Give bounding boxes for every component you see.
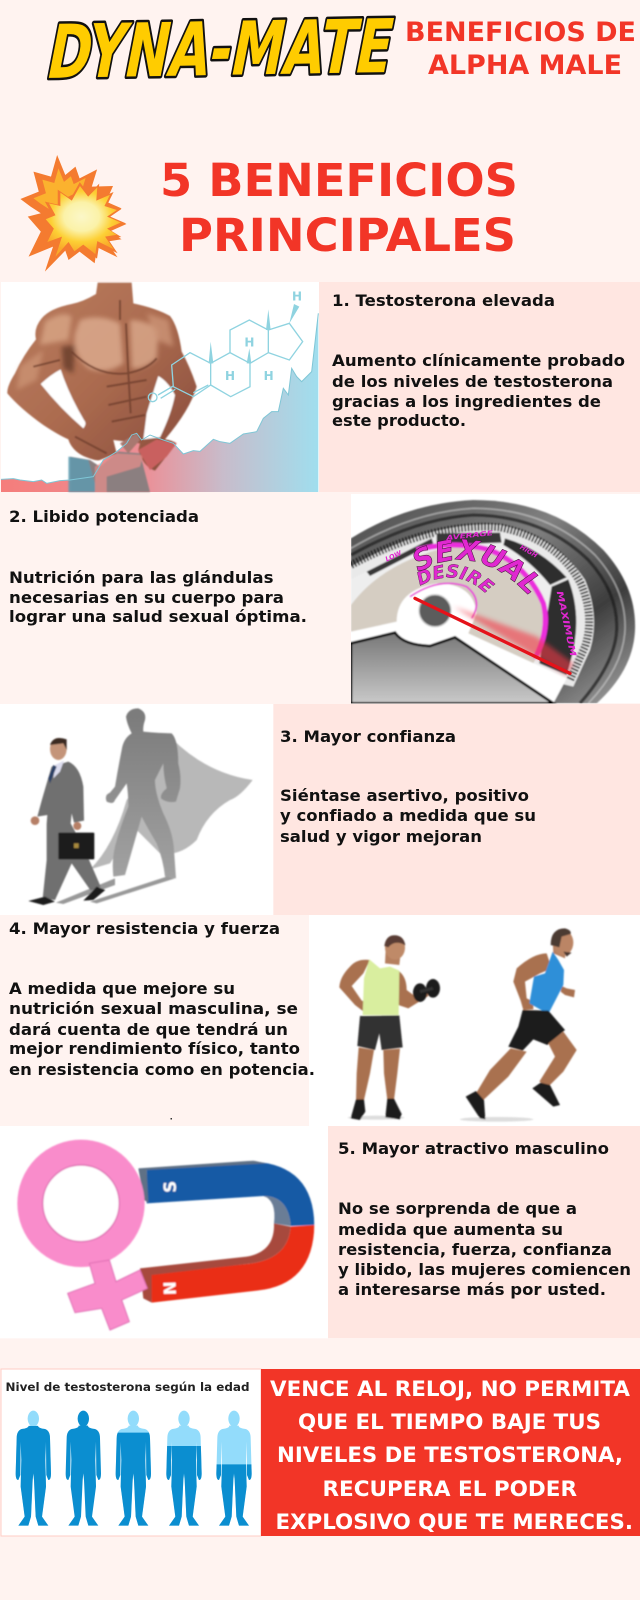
text block 5: y libido, las mujeres comiencen — [338, 1260, 631, 1279]
text block 5: No se sorprenda de que a — [338, 1199, 577, 1218]
image: businessman with superhero shadow — [0, 704, 273, 915]
text block 4: dará cuenta de que tendrá un — [9, 1020, 288, 1039]
text block 4: A medida que mejore su — [9, 979, 235, 998]
header subtitle: BENEFICIOS DE — [405, 17, 636, 48]
gauge labels: HIGH — [518, 543, 539, 560]
text block 2: necesarias en su cuerpo para — [9, 588, 284, 607]
molecule diagram — [148, 290, 303, 402]
text block 1: de los niveles de testosterona — [332, 372, 613, 391]
hero shadow — [106, 708, 181, 878]
text block 1 — [332, 351, 625, 430]
image: female symbol and magnet — [0, 1126, 328, 1338]
female symbol — [30, 1153, 147, 1330]
main title: PRINCIPALES — [179, 209, 516, 262]
briefcase — [58, 833, 94, 859]
text block 2 — [9, 568, 307, 626]
image: testosterone level by age — [1, 1369, 261, 1536]
gauge labels: LOW — [384, 549, 404, 563]
body 2 — [66, 1411, 101, 1526]
panel: benefit 5 attraction — [328, 1126, 640, 1338]
chart title: Nivel de testosterona según la edad — [6, 1380, 250, 1394]
text block 3: salud y vigor mejoran — [280, 827, 482, 846]
header subtitle — [405, 17, 636, 81]
body 5 — [216, 1411, 252, 1526]
lifter figure — [339, 935, 440, 1120]
text block 1: Aumento clínicamente probado — [332, 351, 625, 370]
molecule diagram: H — [225, 369, 235, 383]
header subtitle: ALPHA MALE — [428, 50, 622, 81]
main title — [160, 154, 518, 262]
body 4 — [166, 1411, 202, 1526]
image: female symbol and magnet: N — [161, 1281, 180, 1296]
gauge labels: MAXIMUM — [554, 590, 577, 658]
body 3 — [116, 1411, 151, 1526]
heading 4: 4. Mayor resistencia y fuerza — [9, 919, 280, 938]
text block 2: lograr una salud sexual óptima. — [9, 607, 307, 626]
panel: benefit 2 libido — [9, 507, 307, 626]
businessman — [37, 762, 101, 900]
image: muscular man with molecule and chart — [1, 282, 319, 492]
text block 5: medida que aumenta su — [338, 1220, 563, 1239]
cape — [90, 738, 253, 869]
text block 4 — [9, 979, 315, 1079]
text block 5: a interesarse más por usted. — [338, 1280, 606, 1299]
magnet — [147, 1162, 314, 1226]
logo: Dyna-Mate: DYNA-MATE — [41, 4, 401, 96]
gauge labels: SEXUAL — [414, 538, 538, 594]
panel: benefit 1 testosterone — [319, 282, 640, 492]
heading 1: 1. Testosterona elevada — [332, 291, 555, 310]
callout: red call to action: QUE EL TIEMPO BAJE TUS — [298, 1410, 601, 1435]
molecule diagram: H — [292, 290, 302, 304]
text block 2: Nutrición para las glándulas — [9, 568, 274, 587]
runner figure — [466, 928, 577, 1119]
callout: red call to action: NIVELES DE TESTOSTERONA, — [277, 1443, 623, 1468]
text block 4: en resistencia como en potencia. — [9, 1060, 315, 1079]
icon: explosion burst — [20, 155, 126, 272]
text block 4: mejor rendimiento físico, tanto — [9, 1039, 300, 1058]
text block 1: gracias a los ingredientes de — [332, 392, 601, 411]
man torso — [7, 283, 197, 492]
gauge labels: DESIRE — [417, 564, 496, 593]
image: man lifting and man running — [309, 915, 640, 1126]
text block 5: resistencia, fuerza, confianza — [338, 1240, 612, 1259]
text block 3: Siéntase asertivo, positivo — [280, 786, 529, 805]
pants — [70, 452, 150, 492]
callout: red call to action: RECUPERA EL PODER — [322, 1477, 577, 1502]
molecule diagram: H — [264, 369, 274, 383]
chart line — [1, 313, 318, 483]
text block 5 — [338, 1199, 631, 1299]
callout: red call to action: VENCE AL RELOJ, NO PERMITA — [270, 1377, 630, 1402]
text block 3: y confiado a medida que su — [280, 806, 536, 825]
gauge labels: AVERAGE — [445, 529, 494, 542]
image: sexual desire gauge — [351, 494, 640, 704]
magnet poles: S — [161, 1181, 180, 1193]
callout: red call to action: EXPLOSIVO QUE TE MERECES. — [276, 1510, 633, 1535]
body 1 — [16, 1411, 51, 1526]
gauge labels — [386, 530, 577, 656]
text block 4: nutrición sexual masculina, se — [9, 999, 298, 1018]
main title: 5 BENEFICIOS — [160, 154, 518, 207]
panel: benefit 4 endurance — [9, 919, 315, 1120]
callout: red call to action — [261, 1369, 640, 1536]
heading 3: 3. Mayor confianza — [280, 727, 456, 746]
molecule diagram: H — [244, 336, 254, 350]
heading 2: 2. Libido potenciada — [9, 507, 199, 526]
panel: benefit 3 confidence — [273, 704, 640, 915]
chart area — [1, 313, 318, 492]
heading 5: 5. Mayor atractivo masculino — [338, 1139, 609, 1158]
text block 3 — [280, 786, 536, 846]
gauge needle — [415, 598, 570, 673]
text block 1: este producto. — [332, 411, 466, 430]
body level chart — [16, 1411, 252, 1526]
